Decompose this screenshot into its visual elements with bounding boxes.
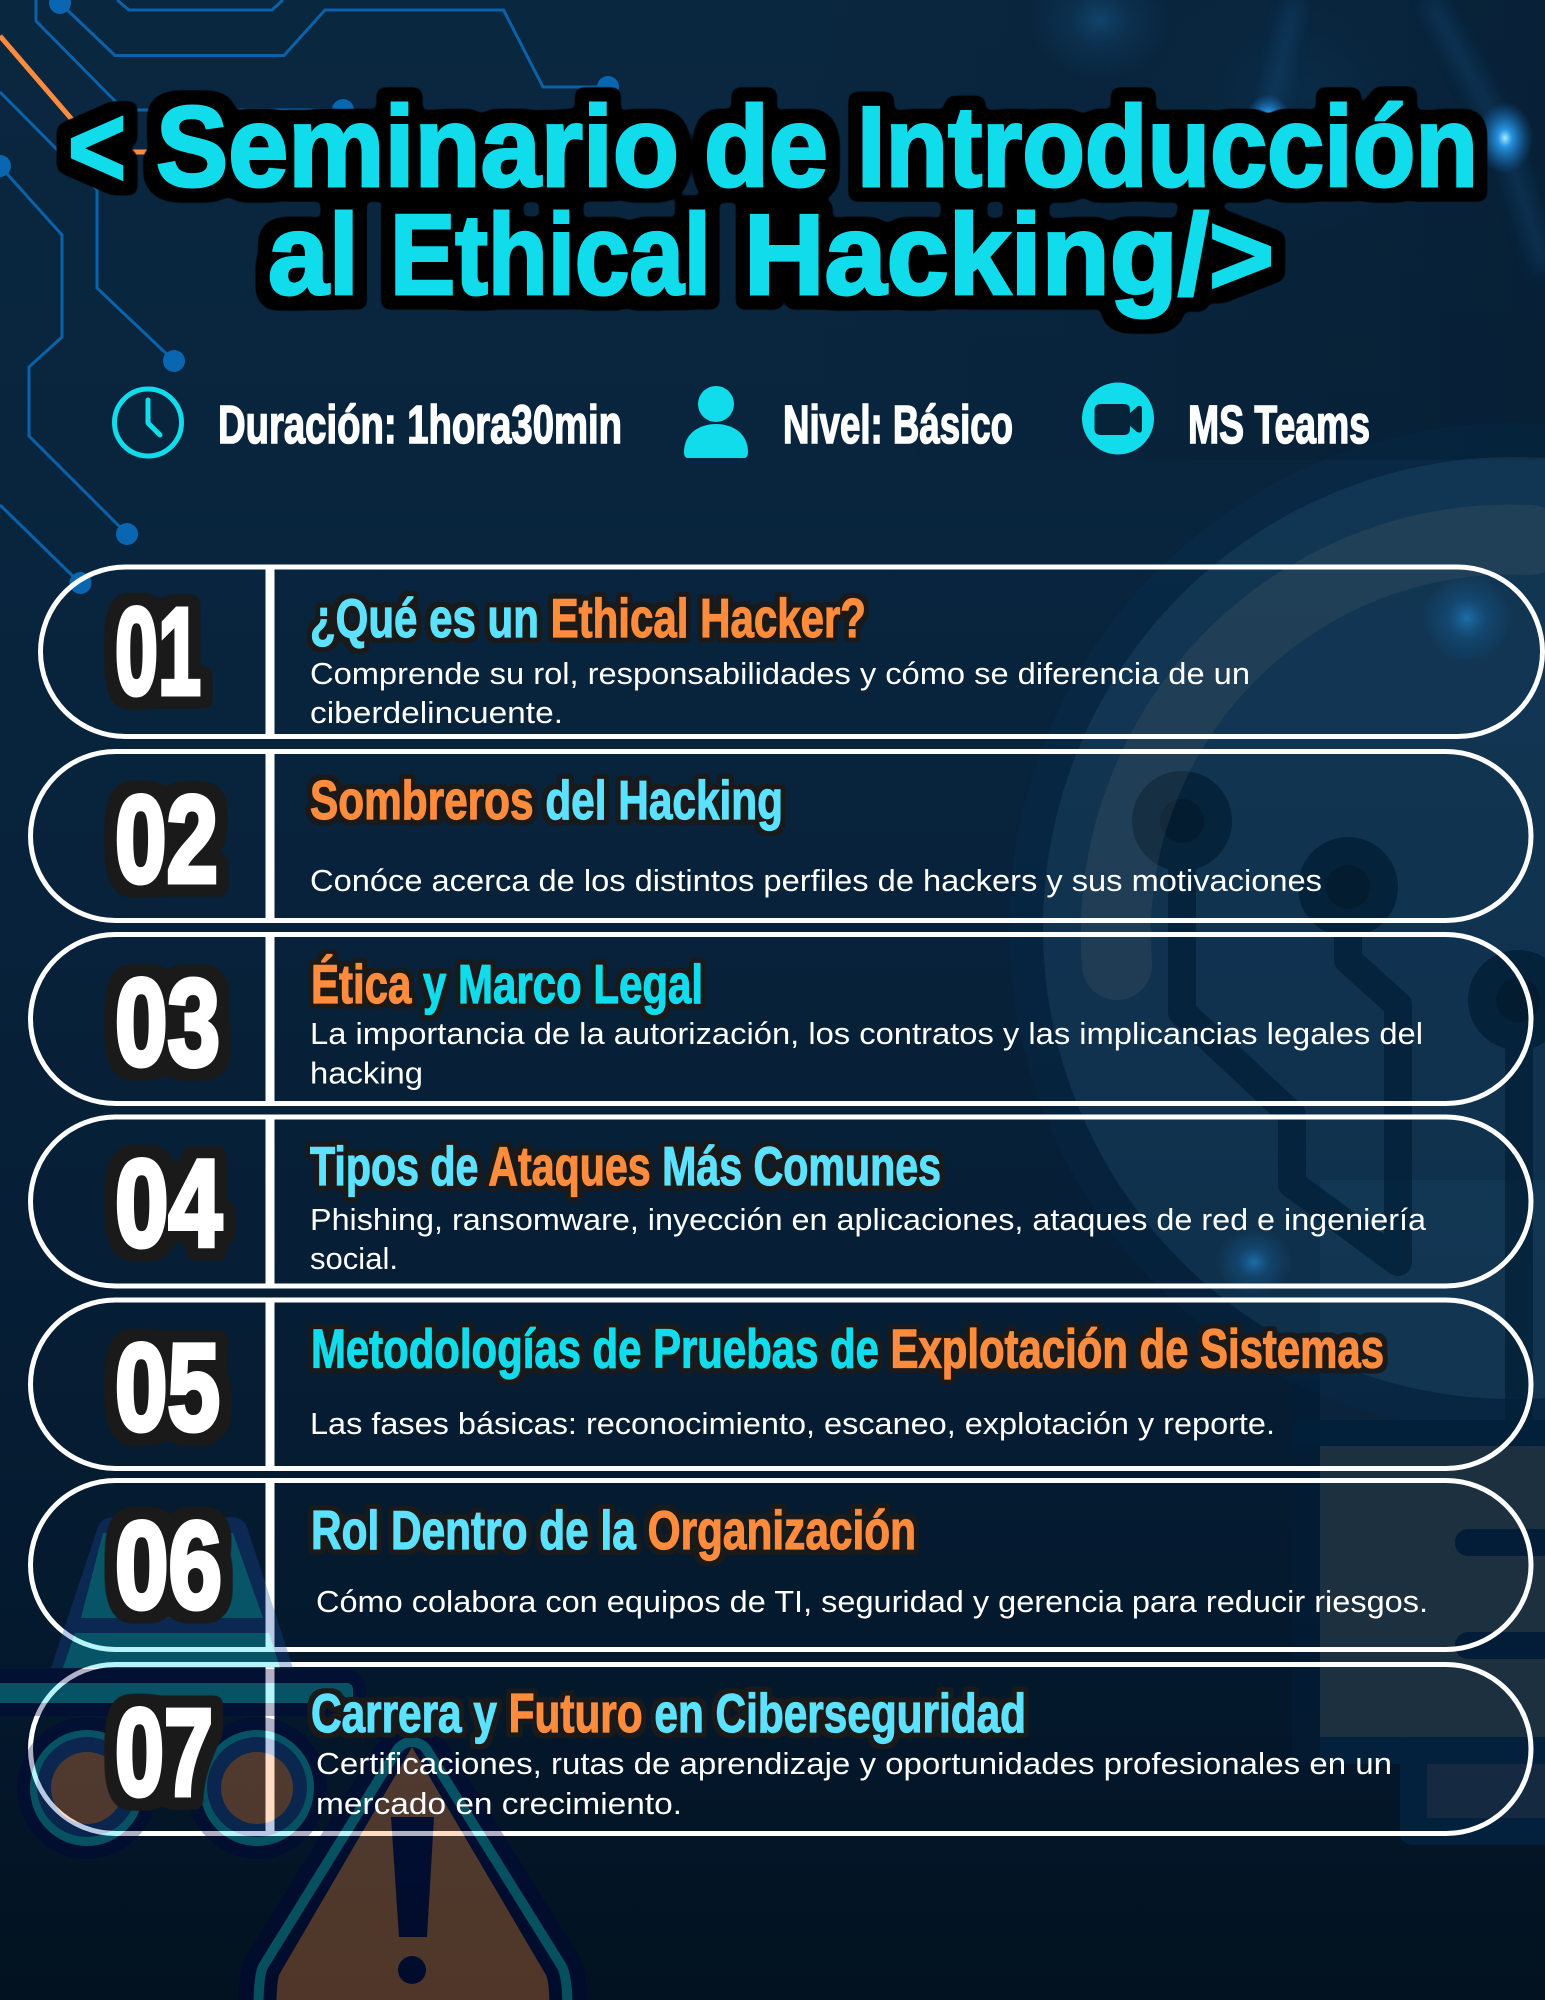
icon: circuit traces top left [0, 0, 619, 594]
info: duration [114, 389, 622, 456]
description 01: Comprende su rol, responsabilidades y cómo se diferencia de un [310, 656, 1250, 691]
description 03: La importancia de la autorización, los contratos y las implicancias legales del [310, 1016, 1423, 1051]
number 01: 01 [115, 584, 201, 721]
description 05: Las fases básicas: reconocimiento, escaneo, explotación y reporte. [310, 1406, 1275, 1441]
number 05: 05 [115, 1320, 220, 1457]
title: < [68, 84, 126, 211]
title: al [268, 192, 359, 319]
title: de [704, 84, 828, 211]
info: duration: Duración: 1hora30min [218, 395, 622, 455]
panel content: row 02 [115, 769, 1322, 909]
title [68, 84, 1478, 319]
panel content: row 06 [115, 1498, 1428, 1635]
description 02: Conóce acerca de los distintos perfiles de hackers y sus motivaciones [310, 863, 1322, 898]
panel content: row 01 [115, 584, 1250, 730]
info: level: Nivel: Básico [783, 395, 1013, 455]
description 07 [316, 1746, 1392, 1821]
heading 03: Ética y Marco Legal [311, 953, 703, 1015]
icon: spy hat with glasses and warning triangle watermark [0, 1517, 549, 2000]
panel outline: row 05 [30, 1300, 1531, 1468]
heading 07: Carrera y Futuro en Ciberseguridad [311, 1682, 1026, 1744]
heading 01: ¿Qué es un Ethical Hacker? [310, 587, 866, 649]
heading 06: Rol Dentro de la Organización [311, 1499, 916, 1561]
number 03: 03 [115, 955, 220, 1092]
heading 02: Sombreros del Hacking [310, 769, 783, 831]
number 06: 06 [115, 1498, 222, 1635]
icon: clock [114, 389, 182, 456]
icon: video camera [1082, 382, 1154, 454]
description 01: ciberdelincuente. [310, 695, 563, 730]
description 04: Phishing, ransomware, inyección en aplicaciones, ataques de red e ingeniería [310, 1202, 1427, 1237]
description 07: mercado en crecimiento. [316, 1786, 682, 1821]
panel content: row 05 [115, 1318, 1384, 1457]
description 01 [310, 656, 1250, 730]
title: Ethical [390, 192, 711, 319]
panel content: row 03 [115, 953, 1423, 1092]
description 03 [310, 1016, 1423, 1090]
heading 04: Tipos de Ataques Más Comunes [310, 1135, 941, 1197]
title: Hacking/> [744, 192, 1274, 319]
title: Seminario [156, 84, 679, 211]
description 04 [310, 1202, 1427, 1276]
panel outline: row 02 [30, 751, 1531, 920]
number 07: 07 [115, 1685, 213, 1822]
info: platform [1082, 382, 1370, 455]
number 02: 02 [115, 772, 218, 909]
description 04: social. [310, 1241, 398, 1276]
description 07: Certificaciones, rutas de aprendizaje y oportunidades profesionales en un [316, 1746, 1392, 1781]
panel outline: row 04 [30, 1117, 1531, 1286]
info: level [684, 386, 1013, 458]
heading 05: Metodologías de Pruebas de Explotación de Sistemas [311, 1318, 1384, 1380]
icon: person [684, 386, 748, 458]
icon: watermark circuit and document [1009, 423, 1545, 1845]
panel outline: row 01 [40, 567, 1542, 736]
panel content: row 07 [115, 1682, 1392, 1822]
info: platform: MS Teams [1188, 395, 1370, 455]
panel outline: row 07 [30, 1664, 1531, 1834]
description 03: hacking [310, 1056, 423, 1090]
description 06: Cómo colabora con equipos de TI, seguridad y gerencia para reducir riesgos. [316, 1584, 1428, 1619]
panel content: row 04 [115, 1135, 1427, 1276]
panel outline: row 03 [30, 934, 1531, 1104]
number 04: 04 [115, 1136, 222, 1273]
panel outline: row 06 [30, 1480, 1531, 1650]
title: Introducción [857, 84, 1478, 211]
